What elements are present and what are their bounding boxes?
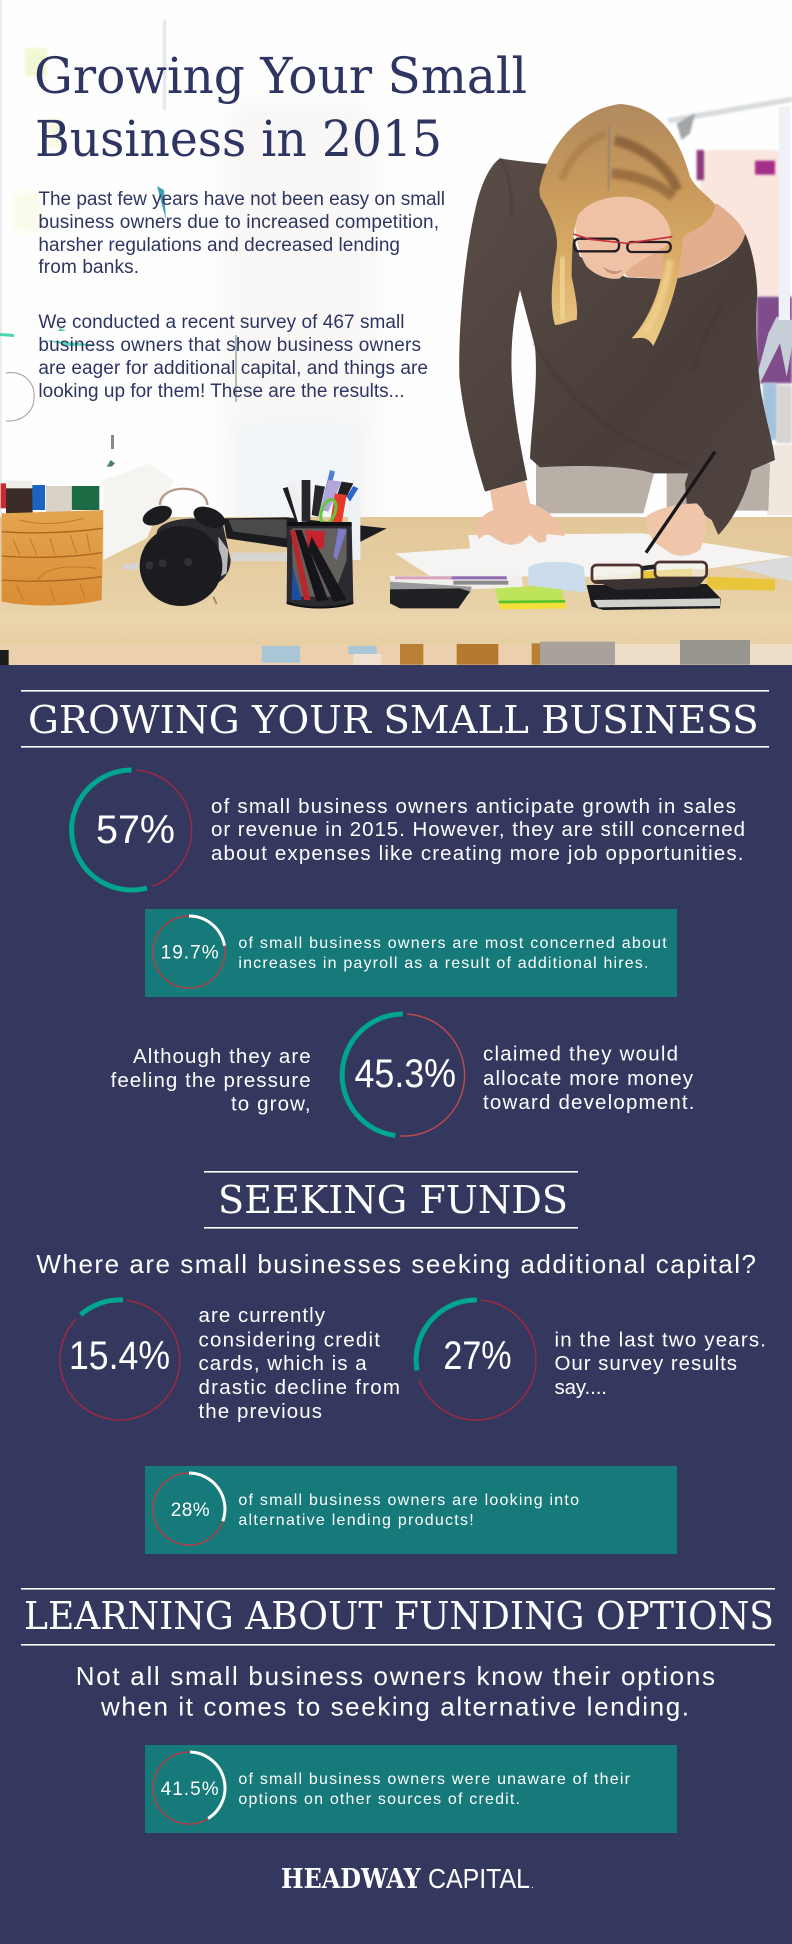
donut: 41.5%: 41.5% — [161, 1779, 219, 1800]
photo: notebook — [587, 577, 721, 610]
text: payroll: increases in payroll as a result of additional hires. — [238, 955, 648, 972]
text: last two years: in the last two years. — [554, 1329, 766, 1352]
woman: dark hair strands — [561, 125, 677, 333]
text: unaware: of small business owners were unaware of their — [238, 1771, 631, 1788]
photo: paper sheets — [395, 533, 792, 577]
photo: sticky notes — [495, 585, 567, 609]
photo: right hand — [645, 503, 706, 556]
text: anticipate growth: of small business owners anticipate growth in sales — [211, 795, 736, 818]
text: alternative lending — [238, 1492, 579, 1529]
woman: glasses — [573, 234, 672, 252]
donut: 27% — [416, 1300, 536, 1420]
photo: tablet and silver rod — [122, 517, 387, 570]
woman: sweater — [459, 158, 775, 535]
photo: calculator — [390, 582, 472, 608]
text: allocate to development — [483, 1043, 694, 1114]
text: last two years: say.... — [554, 1376, 607, 1399]
donut: 19.7% — [153, 916, 225, 988]
logo: headway capital: . — [531, 1880, 534, 1891]
photo: woman — [459, 104, 775, 535]
heading: growing your small business: GROWING YOUR SMALL BUSINESS — [28, 698, 759, 742]
text: anticipate growth — [211, 795, 745, 865]
subheading: know their options: when it comes to seeking alternative lending. — [100, 1692, 689, 1722]
donut: 15.4%: 15.4% — [69, 1334, 170, 1378]
text: alternative lending: alternative lending products! — [238, 1512, 474, 1529]
intro paragraph 1 — [38, 189, 445, 278]
donut: 15.4% — [60, 1300, 180, 1420]
panel: learning about funding options — [21, 1588, 775, 1833]
heading: learning about funding options: LEARNING ABOUT FUNDING OPTIONS — [24, 1594, 774, 1638]
donut: 45.3%: 45.3% — [354, 1052, 456, 1096]
donut: 19.7%: 19.7% — [161, 943, 219, 964]
photo: wooden holder — [2, 510, 103, 605]
text: unaware: options on other sources of credit. — [238, 1791, 520, 1808]
text: pressure to grow: feeling the pressure — [111, 1069, 311, 1092]
subheading: know their options: Not all small business owners know their options — [76, 1661, 715, 1691]
title — [34, 47, 527, 168]
callout: 41.5% unaware — [145, 1745, 677, 1833]
heading: seeking funds: SEEKING FUNDS — [218, 1178, 568, 1222]
photo: alarm clock — [140, 489, 231, 606]
photo: left hand — [476, 481, 565, 545]
intro paragraph 2: We conducted a recent survey of 467 small — [38, 312, 405, 333]
photo: spectacles — [592, 562, 707, 583]
subheading: know their options — [76, 1661, 715, 1722]
photo: pencil cup — [283, 470, 360, 608]
intro paragraph 1: The past few years have not been easy on small — [38, 189, 445, 210]
photo: tape roll — [528, 562, 586, 593]
photo: blurred studio background left — [0, 0, 375, 650]
woman: lips — [603, 267, 623, 274]
woman: hair — [539, 104, 715, 346]
callout: 28% alternative lending — [145, 1466, 677, 1554]
text: credit cards: the previous — [198, 1400, 322, 1423]
text: last two years: Our survey results — [554, 1352, 737, 1375]
text: pressure to grow: Although they are — [133, 1045, 311, 1068]
donut: 41.5% — [153, 1752, 225, 1824]
subheading: seeking capital: Where are small businesses seeking additional capital? — [36, 1249, 756, 1279]
logo: headway capital — [281, 1863, 534, 1895]
text: payroll — [238, 935, 667, 972]
donut: 57%: 57% — [96, 808, 175, 852]
photo: desk items right — [390, 452, 792, 665]
woman: face — [575, 187, 675, 279]
intro paragraph 1: from banks. — [38, 257, 139, 278]
title: Business in 2015 — [35, 110, 442, 168]
text: last two years — [554, 1329, 766, 1399]
panel: seeking funds — [36, 1171, 766, 1554]
donut: 28%: 28% — [171, 1500, 210, 1521]
text: credit cards — [198, 1304, 400, 1423]
intro paragraph 1: business owners due to increased competition, — [38, 212, 439, 233]
title: Growing Your Small — [34, 47, 527, 105]
photo: thread spools — [1, 481, 99, 513]
photo: ruler strip — [390, 575, 523, 589]
photo: pen — [646, 452, 715, 553]
photo: white box behind the desk — [103, 460, 173, 560]
text: pressure to grow — [111, 1045, 311, 1116]
photo: floor under desk — [0, 645, 792, 665]
intro paragraph 2: looking up for them! These are the results... — [38, 381, 405, 402]
text: payroll: of small business owners are most concerned about — [238, 935, 667, 952]
panel: growing your small business — [21, 690, 769, 1136]
text: anticipate growth: about expenses like creating more job opportunities. — [211, 842, 744, 865]
intro paragraph 2: are eager for additional capital, and things are — [38, 358, 428, 379]
text: credit cards: cards, which is a — [198, 1352, 367, 1375]
text: anticipate growth: or revenue in 2015. However, they are still concerned — [211, 818, 745, 841]
text: alternative lending: of small business owners are looking into — [238, 1492, 579, 1509]
woman: trousers — [536, 457, 770, 513]
intro paragraph 1: harsher regulations and decreased lending — [38, 235, 400, 256]
callout: 19.7% payroll — [145, 909, 677, 997]
text: unaware — [238, 1771, 631, 1808]
photo: desk — [0, 517, 792, 647]
photo: tape measure — [632, 568, 775, 591]
text: allocate to development: toward development. — [483, 1091, 694, 1114]
woman: sleeve fold lines — [500, 158, 723, 467]
donut: 28% — [153, 1473, 225, 1545]
text: credit cards: considering credit — [198, 1329, 380, 1352]
text: allocate to development: claimed they would — [483, 1043, 678, 1066]
woman: neck and shoulder — [607, 203, 745, 279]
text: allocate to development: allocate more money — [483, 1067, 694, 1090]
text: credit cards: drastic decline from — [198, 1376, 400, 1399]
donut: 27%: 27% — [443, 1334, 512, 1378]
logo: headway capital: CAPITAL — [428, 1863, 530, 1894]
donut: 57% — [72, 770, 192, 890]
photo: clothes rack right — [667, 97, 792, 515]
panel: hero photo — [0, 0, 792, 665]
intro paragraph 2: business owners that show business owners — [38, 335, 421, 356]
logo: headway capital: HEADWAY — [281, 1864, 421, 1895]
photo: stool legs and trouser legs — [400, 640, 792, 665]
photo: laptop corner — [733, 557, 792, 582]
intro paragraph 2 — [38, 312, 428, 402]
text: pressure to grow: to grow, — [231, 1093, 311, 1116]
donut: 45.3% — [342, 1014, 465, 1136]
text: credit cards: are currently — [198, 1304, 326, 1327]
